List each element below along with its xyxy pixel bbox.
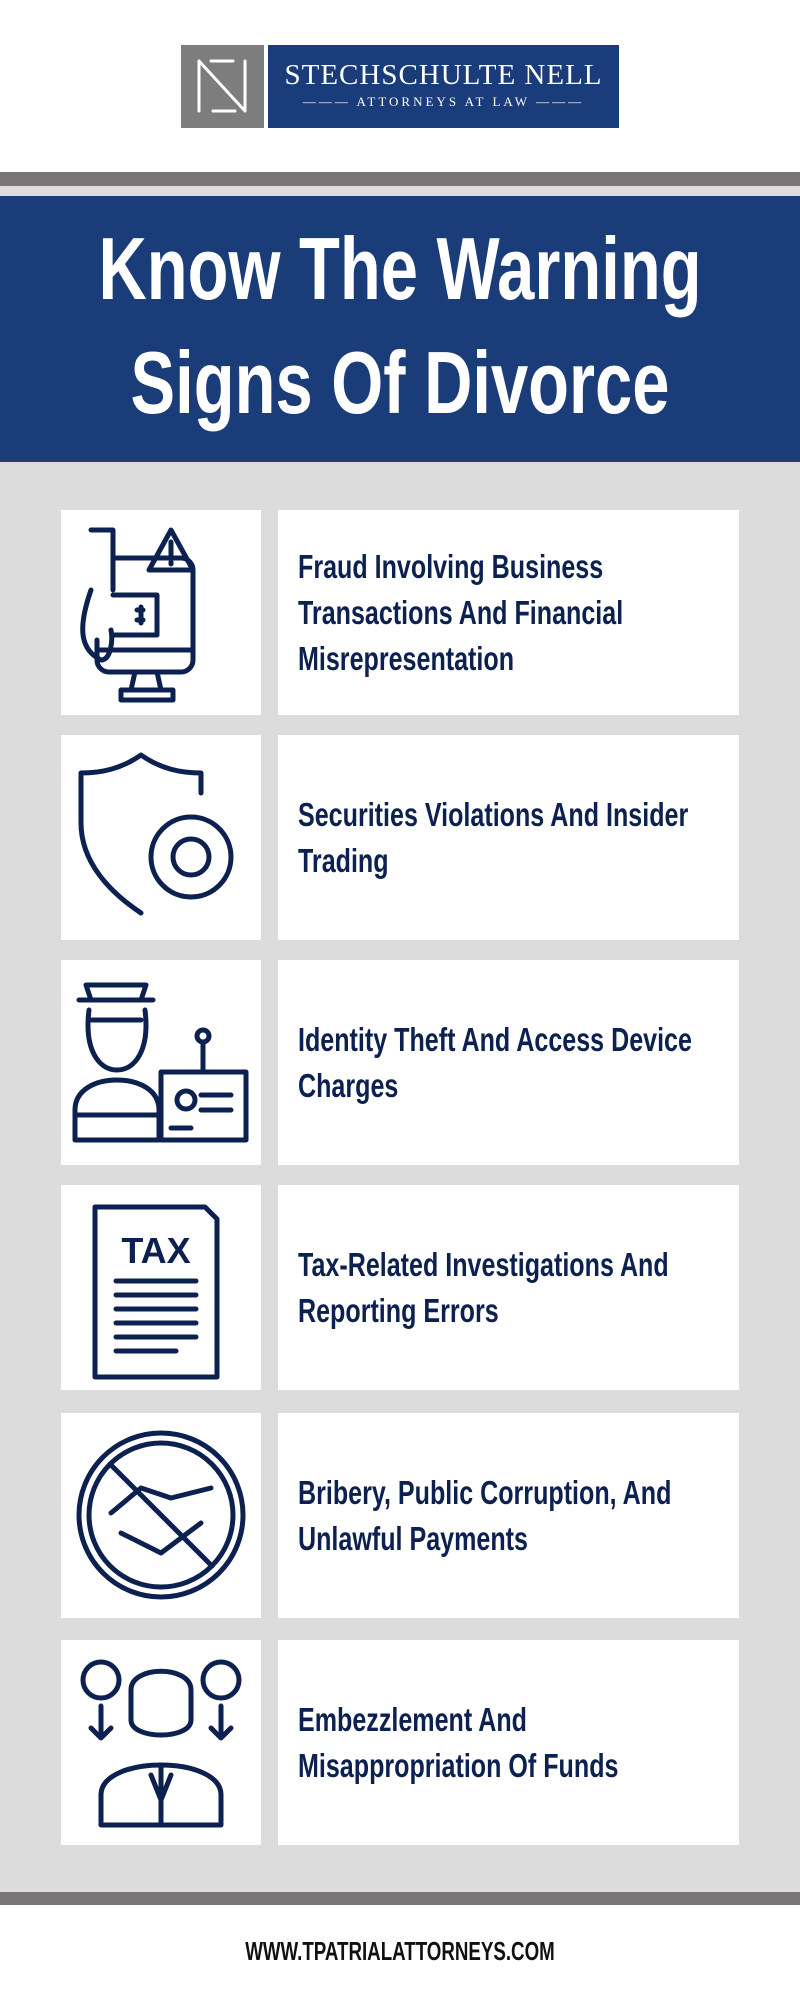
logo wordmark [268,45,619,128]
row 2 text [278,735,739,940]
logo [181,45,619,128]
row 6 text: Misappropriation Of Funds [298,1746,618,1784]
logo wordmark: ——— ATTORNEYS AT LAW ——— [303,94,584,109]
row 2 icon: shield gear [61,735,261,940]
row 4 icon: tax document [61,1185,261,1390]
row 5 text [278,1413,739,1618]
row 3 text [278,960,739,1165]
row 1 text: Misrepresentation [298,640,514,676]
title [98,219,702,432]
row 1 icon: computer fraud [61,510,261,715]
row 5 text: Unlawful Payments [298,1520,528,1556]
logo mark [181,45,264,128]
row 3 text: Identity Theft And Access Device [298,1020,692,1058]
header banner [0,196,800,462]
row 6 text: Embezzlement And [298,1700,527,1738]
title: Signs Of Divorce [131,333,669,432]
row 6 text [278,1640,739,1845]
row 1 text: Transactions And Financial [298,594,623,630]
footer url: WWW.TPATRIALATTORNEYS.COM [245,1936,555,1966]
row 3 text: Charges [298,1066,398,1104]
row 4 text [278,1185,739,1390]
row 2 text: Securities Violations And Insider [298,796,688,832]
row 1 text: Fraud Involving Business [298,548,603,584]
row 4 text: Tax-Related Investigations And [298,1246,669,1282]
row 1 text [278,510,739,715]
title: Know The Warning [98,219,702,318]
row 4 text: Reporting Errors [298,1292,499,1328]
row 5 text: Bribery, Public Corruption, And [298,1474,671,1510]
row 2 text: Trading [298,842,389,878]
content background [0,462,800,1892]
row 3 icon: identity thief [61,960,261,1165]
row 4 icon: tax document: TAX [121,1230,191,1271]
logo wordmark: STECHSCHULTE NELL [284,59,603,91]
row 6 icon: embezzlement [61,1640,261,1845]
row 5 icon: no bribery [61,1413,261,1618]
